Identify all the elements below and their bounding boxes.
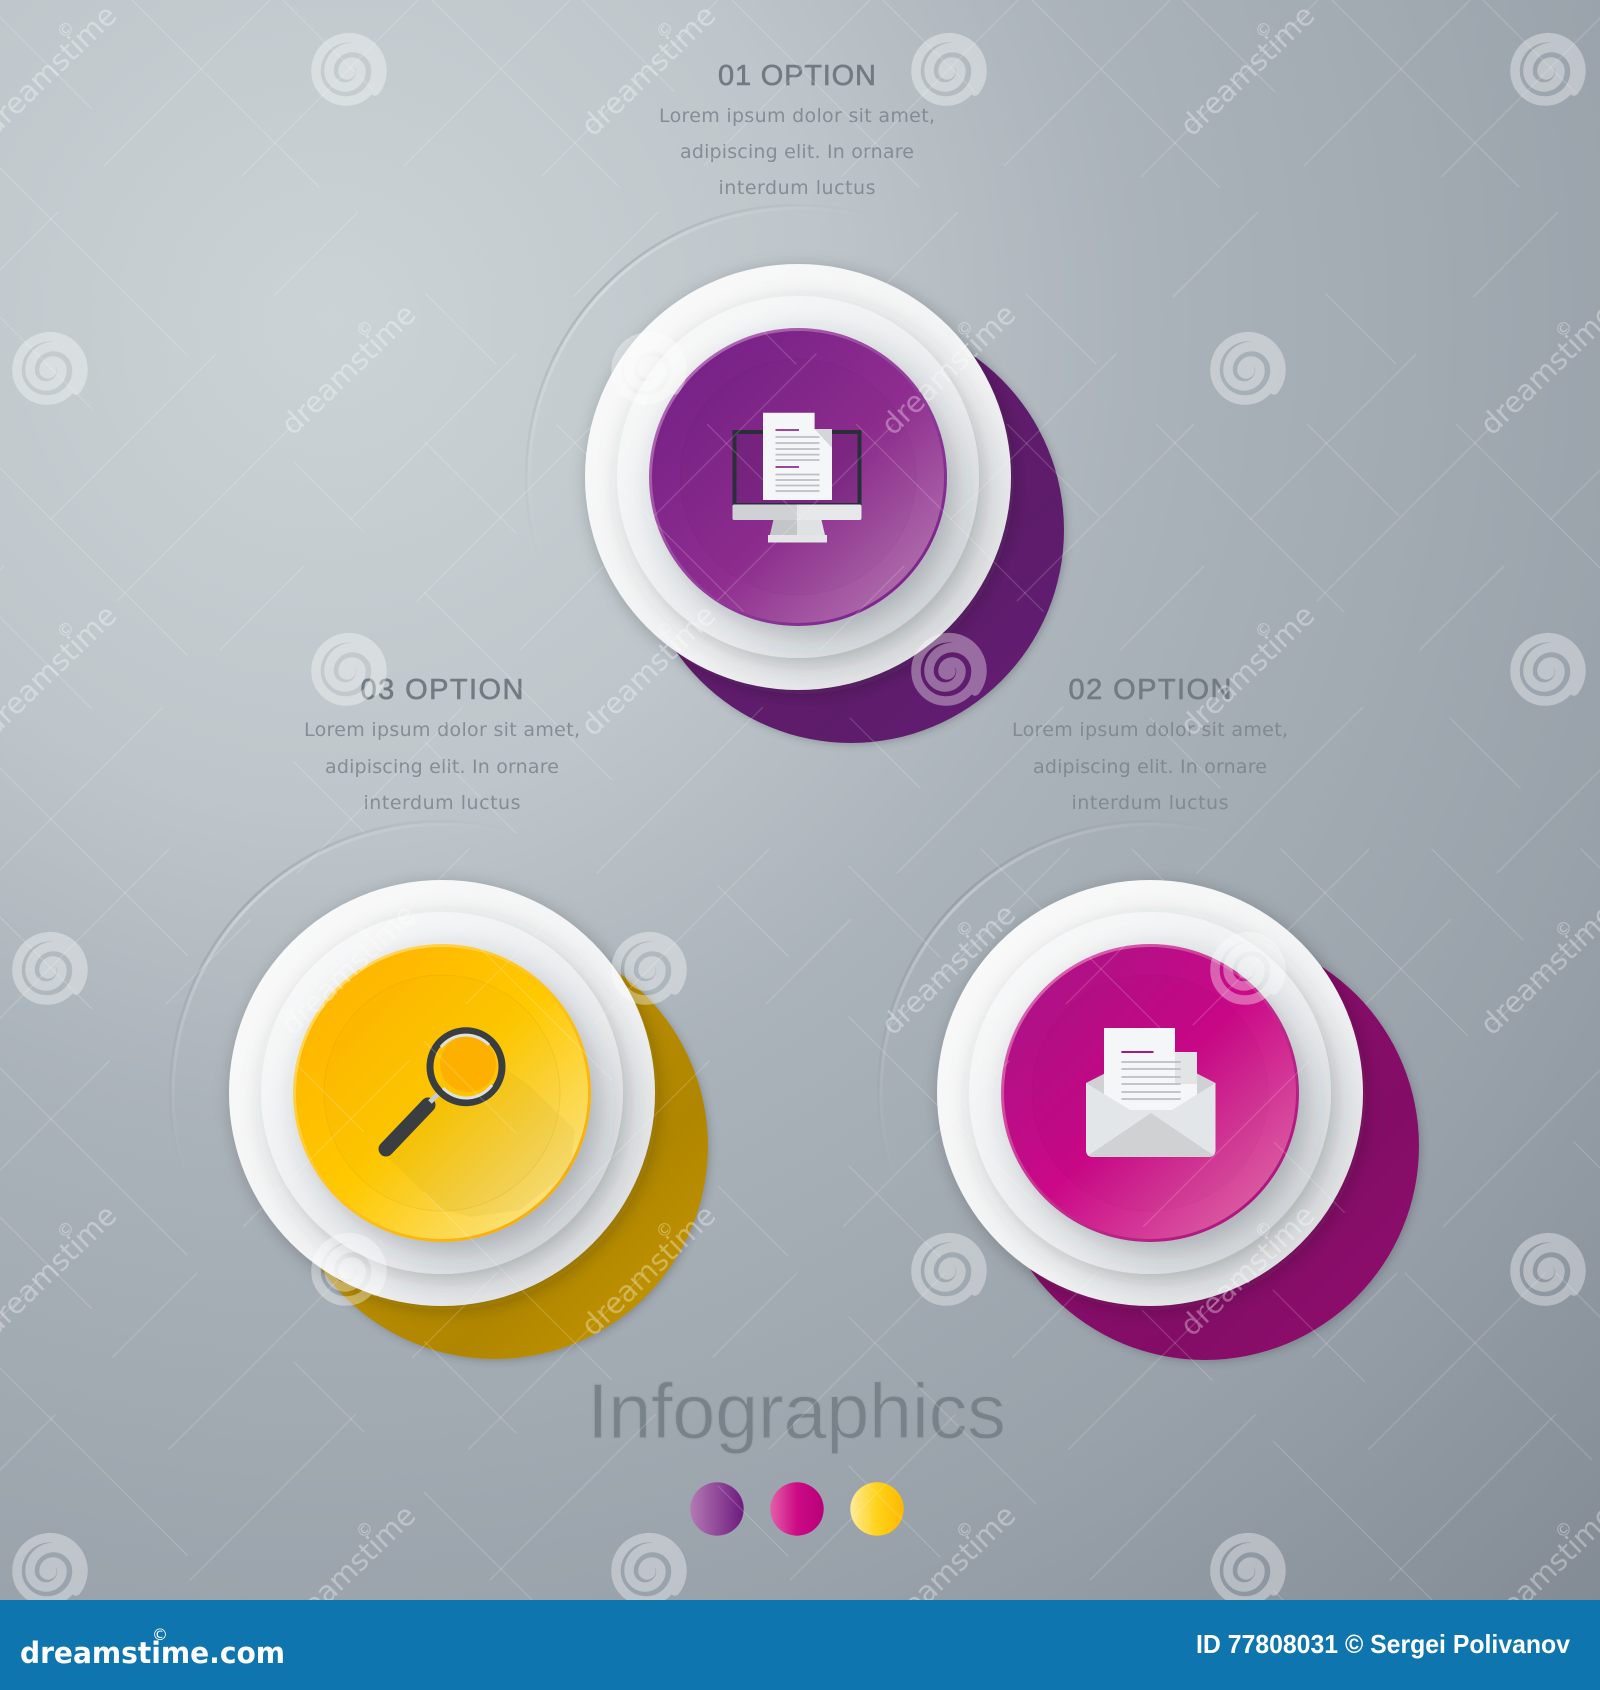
watermark wordmarks: dreamstime (1173, 598, 1321, 743)
panel: option 03 yellow disc (170, 821, 708, 1359)
footer credit: ID 77808031 © Sergei Polivanov (1196, 1629, 1571, 1659)
footer logo: © (152, 1625, 168, 1644)
watermark wordmarks: dreamstime (274, 897, 422, 1042)
watermark wordmarks: © (352, 1517, 378, 1543)
footer bar (0, 1600, 1600, 1690)
option 03 text block: 03 OPTION (360, 674, 524, 706)
watermark wordmarks: dreamstime (274, 1498, 422, 1643)
watermark wordmarks: © (1551, 1517, 1577, 1543)
watermark wordmarks: dreamstime (574, 598, 722, 743)
option 02 text block: adipiscing elit. In ornare (1033, 756, 1267, 778)
title: Infographics (587, 1367, 1006, 1455)
watermark wordmarks: © (1551, 316, 1577, 342)
option 01 text block: adipiscing elit. In ornare (680, 141, 914, 163)
option 01 text block: Lorem ipsum dolor sit amet, (659, 105, 935, 127)
watermark wordmarks: © (53, 617, 79, 643)
watermark wordmarks: dreamstime (874, 1498, 1022, 1643)
option 02 text block (1012, 674, 1288, 814)
watermark wordmarks: © (652, 617, 678, 643)
watermark wordmarks: © (1251, 17, 1277, 43)
watermark wordmarks: dreamstime (1173, 1198, 1321, 1343)
icon: open envelope with letter (1086, 1028, 1216, 1157)
watermark wordmarks: © (652, 17, 678, 43)
footer logo: dreamstime.com (20, 1636, 285, 1670)
panel: option 01 purple disc (526, 205, 1064, 743)
watermark wordmarks: © (352, 916, 378, 942)
watermark wordmarks: © (1251, 617, 1277, 643)
option 03 text block: adipiscing elit. In ornare (325, 756, 559, 778)
watermark wordmarks: © (53, 17, 79, 43)
watermark wordmarks: dreamstime (574, 1198, 722, 1343)
option 01 text block (659, 60, 935, 199)
watermark wordmarks: dreamstime (874, 297, 1022, 442)
option 03 text block: interdum luctus (364, 792, 520, 814)
option 03 text block (304, 674, 580, 814)
watermark wordmarks: dreamstime (574, 0, 722, 143)
legend dots (690, 1482, 904, 1536)
watermark wordmarks: © (652, 1217, 678, 1243)
icon: magnifying glass (382, 1031, 575, 1217)
watermark wordmarks: dreamstime (274, 297, 422, 442)
watermark wordmarks: © (1251, 1217, 1277, 1243)
watermark wordmarks: © (1551, 916, 1577, 942)
watermark wordmarks: dreamstime (874, 897, 1022, 1042)
option 02 text block: 02 OPTION (1068, 674, 1232, 706)
watermark wordmarks: © (352, 316, 378, 342)
panel: option 02 magenta disc (878, 821, 1419, 1360)
watermark wordmarks: © (53, 1217, 79, 1243)
option 02 text block: Lorem ipsum dolor sit amet, (1012, 719, 1288, 741)
watermark wordmarks: © (952, 1517, 978, 1543)
icon: monitor with document (732, 413, 862, 542)
option 01 text block: 01 OPTION (718, 60, 876, 92)
option 01 text block: interdum luctus (718, 177, 876, 199)
option 03 text block: Lorem ipsum dolor sit amet, (304, 719, 580, 741)
option 02 text block: interdum luctus (1072, 792, 1228, 814)
watermark wordmarks: © (952, 916, 978, 942)
watermark wordmarks: © (952, 316, 978, 342)
watermark wordmarks: dreamstime (1173, 0, 1321, 143)
